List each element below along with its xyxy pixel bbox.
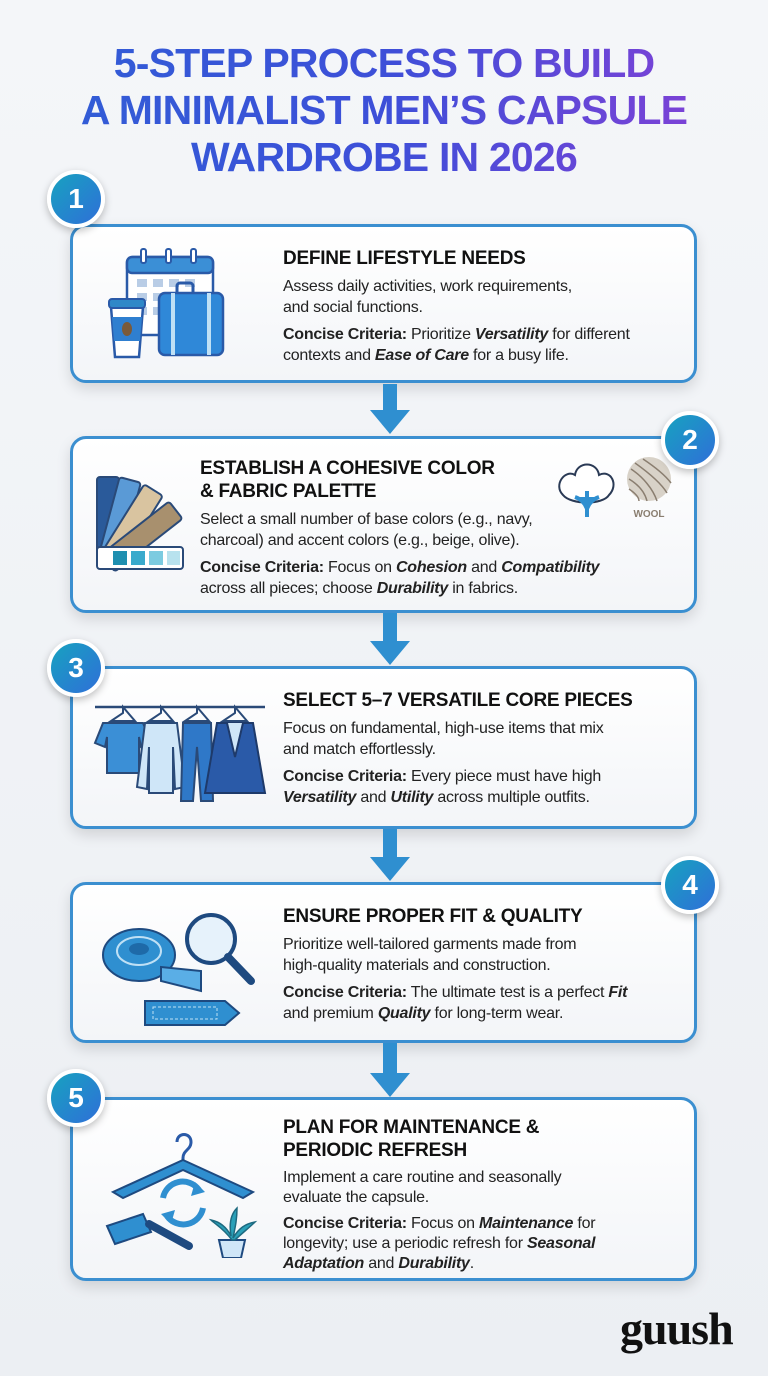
badge 2 [661,411,719,469]
logo: guush [620,1303,733,1354]
icon: calendar coffee briefcase [108,248,224,358]
text: step 3: Concise Criteria: Every piece must have high [283,768,601,785]
panel: step 4 [70,882,697,1043]
text: step 4: and premium Quality for long-term wear. [283,1005,563,1022]
badge 4 [661,856,719,914]
arrow 1 [370,384,410,434]
title [0,40,768,181]
badge 1 [47,170,105,228]
badge 5 [47,1069,105,1127]
text: step 1: Assess daily activities, work requirements, [283,278,572,295]
text: step 3: Versatility and Utility across multiple outfits. [283,789,590,806]
badge 3 [47,639,105,697]
text: step 2 [200,458,600,597]
text: step 4: ENSURE PROPER FIT & QUALITY [283,906,582,927]
text: step 1: Concise Criteria: Prioritize Versatility for different [283,326,630,343]
text: step 2: charcoal) and accent colors (e.g., beige, olive). [200,532,519,549]
text: step 5: Concise Criteria: Focus on Maintenance for [283,1215,595,1232]
title: WARDROBE IN 2026 [191,134,577,180]
panel: step 3 [70,666,697,829]
text: step 4 [283,906,628,1022]
text: step 3: and match effortlessly. [283,741,436,758]
text: step 3 [283,690,633,806]
arrow 3 [370,829,410,881]
panel: step 2 [70,436,697,613]
icon: tape measure magnifier tag [102,913,255,1026]
arrow 4 [370,1043,410,1097]
title: A MINIMALIST MEN’S CAPSULE [81,87,687,133]
text: step 1 [283,248,630,364]
text: step 4: Concise Criteria: The ultimate test is a perfect Fit [283,984,627,1001]
icon: hanger brush plant refresh [106,1133,258,1258]
text: step 5 [282,1117,596,1272]
text: step 2: ESTABLISH A COHESIVE COLOR [200,458,495,479]
badge 4: 4 [682,869,698,900]
title: 5-STEP PROCESS TO BUILD [114,40,654,86]
badge 1: 1 [68,183,84,214]
badge 3: 3 [68,652,84,683]
badge 2: 2 [682,424,698,455]
text: step 5: PERIODIC REFRESH [283,1140,467,1161]
text: step 5: longevity; use a periodic refresh for Seasonal [283,1235,595,1252]
text: step 2: Concise Criteria: Focus on Cohesion and Compatibility [200,559,599,576]
text: step 3: Focus on fundamental, high-use items that mix [283,720,603,737]
badge 5: 5 [68,1082,84,1113]
text: step 5: PLAN FOR MAINTENANCE & [283,1117,539,1138]
text: step 5: evaluate the capsule. [283,1189,429,1206]
text: step 3: SELECT 5–7 VERSATILE CORE PIECES [283,690,633,711]
panel: step 1 [70,224,697,383]
text: step 4: Prioritize well-tailored garments made from [283,936,576,953]
text: step 1: DEFINE LIFESTYLE NEEDS [283,248,526,269]
icon: cotton and wool: WOOL [633,509,665,520]
text: step 5: Implement a care routine and seasonally [283,1169,561,1186]
text: step 2: & FABRIC PALETTE [200,481,376,502]
icon: clothes rack [94,704,266,802]
arrow 2 [370,613,410,665]
text: step 1: contexts and Ease of Care for a busy life. [283,347,569,364]
icon: color swatches [96,476,184,572]
text: step 5: Adaptation and Durability. [283,1255,474,1272]
panel: step 5 [70,1097,697,1281]
text: step 2: across all pieces; choose Durability in fabrics. [200,580,518,597]
text: step 2: Select a small number of base colors (e.g., navy, [200,511,532,528]
icon: cotton and wool [558,457,672,520]
text: step 4: high-quality materials and construction. [283,957,550,974]
text: step 1: and social functions. [283,299,423,316]
